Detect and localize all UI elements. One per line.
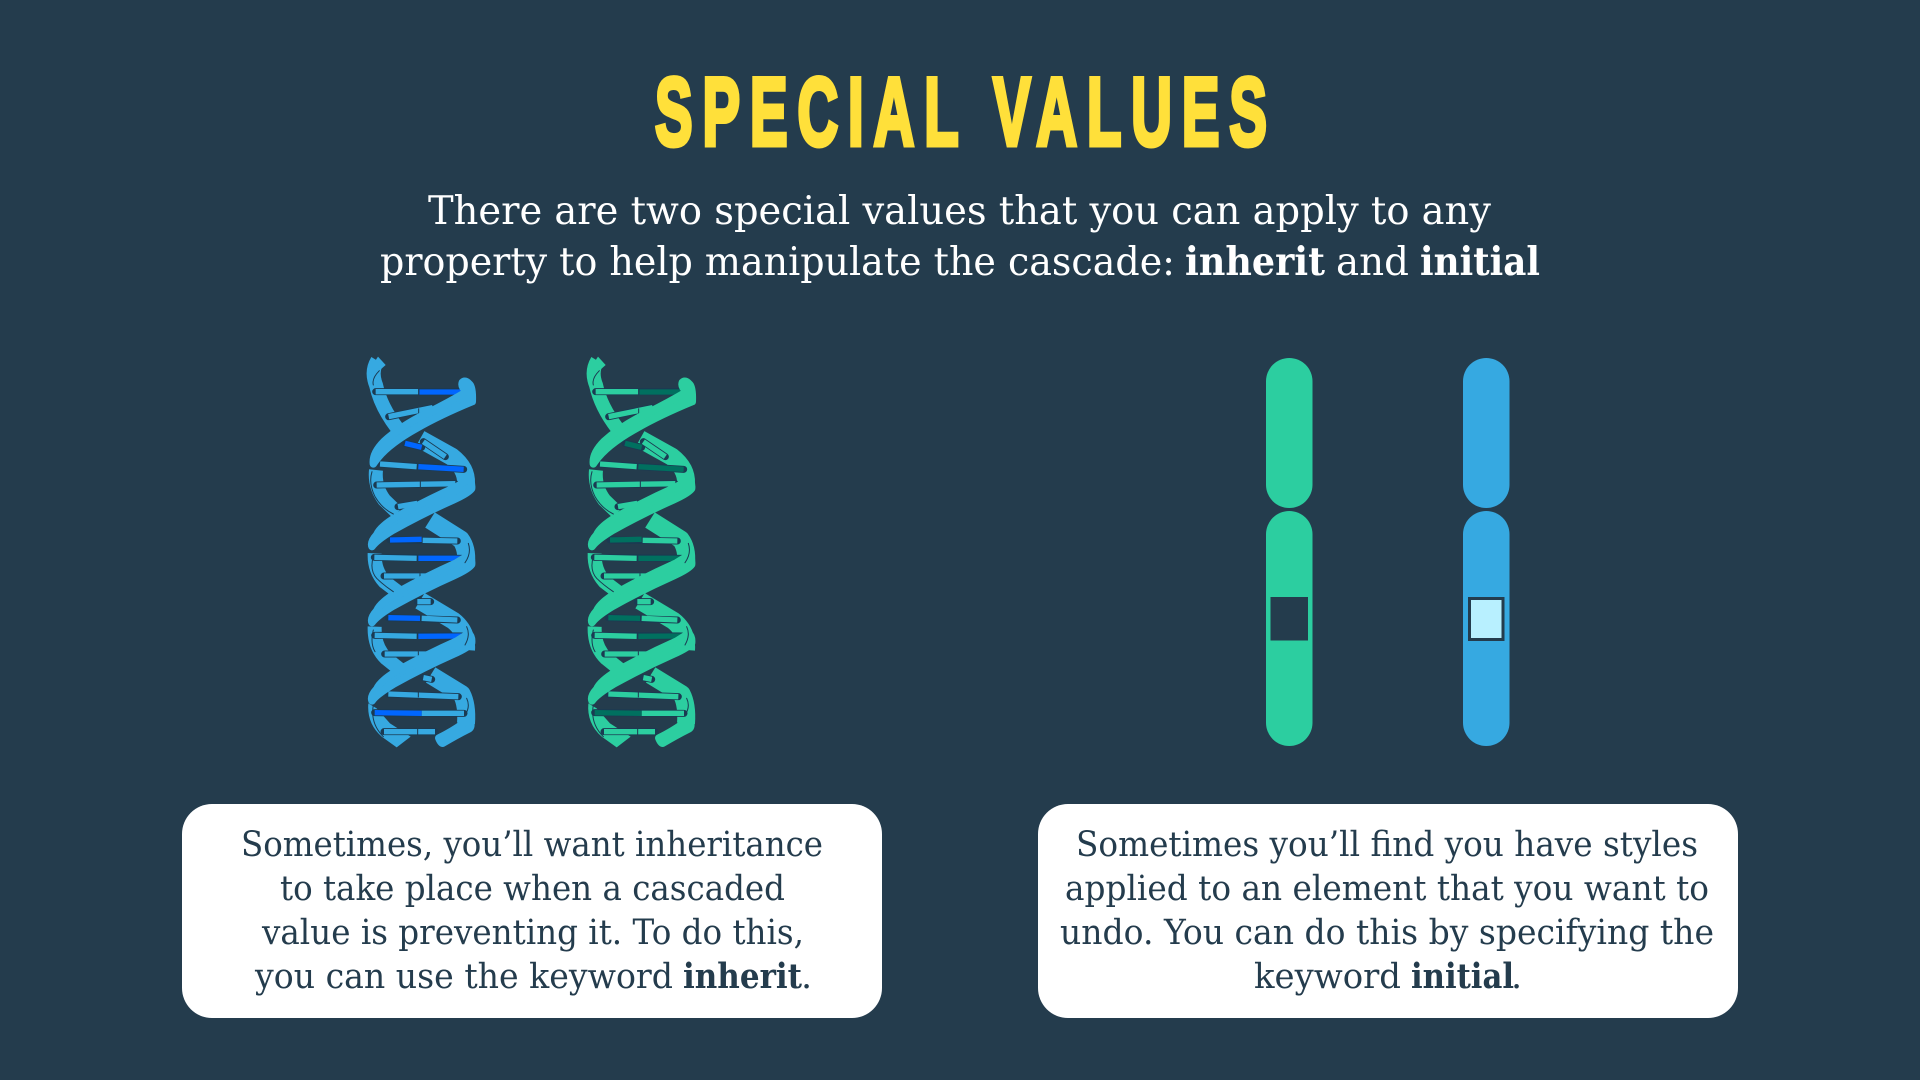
text: inherit description xyxy=(241,825,823,997)
icon: blue DNA helix xyxy=(368,357,472,747)
text: initial description xyxy=(1060,825,1714,997)
text: inherit description: to take place when a cascaded xyxy=(280,869,785,909)
intro text: There are two special values that you can apply to any xyxy=(428,189,1491,234)
panel: inherit xyxy=(182,804,882,1018)
title: SPECIAL VALUES xyxy=(655,57,1267,166)
intro text: and xyxy=(1336,240,1409,285)
intro text xyxy=(380,189,1540,285)
icon: green chromosome xyxy=(1266,358,1312,746)
panel: initial xyxy=(1038,804,1738,1018)
text: initial description: initial xyxy=(1411,956,1514,997)
text: inherit description: Sometimes, you’ll want inheritance xyxy=(241,825,823,865)
text: initial description: applied to an element that you want to xyxy=(1065,869,1709,909)
intro text: initial xyxy=(1420,239,1540,285)
text: inherit description: inherit xyxy=(683,956,802,997)
icon: blue chromosome xyxy=(1463,358,1510,746)
intro text: property to help manipulate the cascade: xyxy=(380,240,1175,285)
text: inherit description: you can use the keyword xyxy=(254,957,673,997)
text: initial description: undo. You can do this by specifying the xyxy=(1060,913,1714,953)
icon: green DNA helix xyxy=(588,357,692,747)
text: initial description: Sometimes you’ll find you have styles xyxy=(1076,825,1698,865)
text: inherit description: value is preventing it. To do this, xyxy=(261,913,804,953)
intro text: inherit xyxy=(1185,239,1325,285)
text: initial description: keyword xyxy=(1254,957,1401,997)
text: inherit description: . xyxy=(801,957,812,997)
text: initial description: . xyxy=(1511,957,1522,997)
